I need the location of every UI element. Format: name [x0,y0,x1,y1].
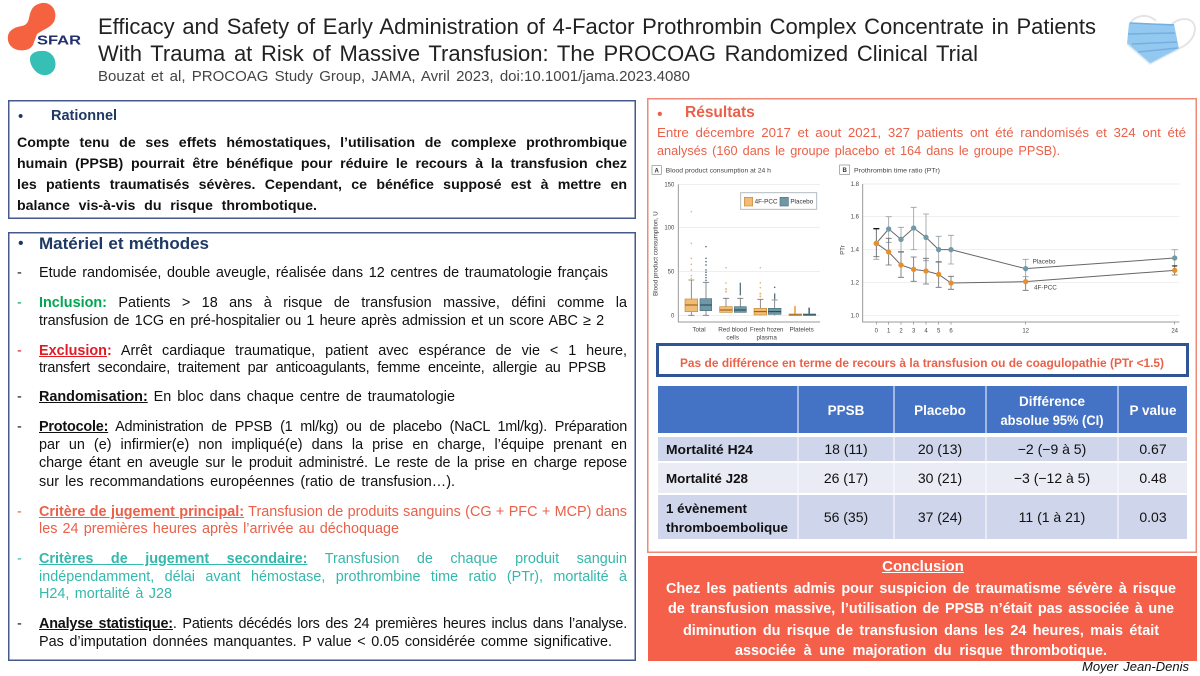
text block: population [657,125,1186,158]
chart: blood product consumption boxplot: plasma [756,334,777,341]
text: exclusion: transfert secondaire, traitement par anticoagulants, femme enceinte, allergie au PPSB [39,360,606,376]
row: événement thromboembolique: thromboembolique [666,520,788,535]
bullet: méthodes: • [18,235,24,252]
chart: blood product consumption boxplot: cells [726,334,739,341]
chart: prothrombin time ratio: 1.2 [851,281,860,287]
text: critère principal: les 24 premières heures après l’arrivée au déchoquage [39,521,399,537]
text: inclusion: Inclusion: Patients > 18 ans à risque de transfusion massive, défini comme la [39,295,627,311]
legend [741,193,817,209]
heading: conclusion: Conclusion [882,558,964,575]
series: 4F-PCC [874,241,1177,286]
text: analyse statistique [17,616,627,650]
bullet: résultats: • [657,106,663,123]
boxes [685,299,802,315]
table: mortalité et événements [658,386,1187,539]
chart: prothrombin time ratio: 1 [887,328,891,334]
chart: blood product consumption boxplot: 150 [664,182,675,188]
text: protocole: par un (e) infirmier(e) non impliqué(e) dans la prise en charge, l’équipe prenant en [39,437,627,453]
row: mortalité H24: 18 (11) [824,441,868,457]
row: mortalité H24: 0.67 [1139,441,1167,457]
text block: population: analysés (160 dans le groupe placebo et 164 dans le groupe PPSB). [657,144,1060,158]
chart: blood product consumption boxplot: Blood product consumption at 24 h [666,167,772,174]
chart: blood product consumption boxplot: 0 [671,313,675,319]
text block: rationale [17,135,627,214]
text: analyse statistique: Analyse statistique:. Patients décédés lors des 24 premières heures inclus dans l’analyse. [39,616,627,632]
chart: prothrombin time ratio: 0 [875,328,879,334]
heading: rationnel: Rationnel [51,108,117,124]
row: événement thromboembolique [658,495,1187,539]
row: événement thromboembolique: 56 (35) [824,509,868,525]
text block: conclusion: associée à une majoration du risque thrombotique. [735,643,1107,659]
text: critère principal: - [17,504,22,520]
row: événement thromboembolique: 1 évènement [666,501,748,516]
row: mortalité J28: −3 (−12 à 5) [1014,470,1090,486]
series: placebo [874,225,1177,271]
whiskers [688,280,778,315]
header row: PPSB [828,403,865,418]
title: With Trauma at Risk of Massive Transfusion: The PROCOAG Randomized Clinical Trial [98,41,978,66]
row: événement thromboembolique: 37 (24) [918,509,962,525]
header row: absolue 95% (CI) [1000,413,1104,428]
legend: 4F-PCC [755,199,778,206]
text: inclusion [17,295,627,329]
chart: prothrombin time ratio: 1.6 [851,215,860,221]
title: Bouzat et al, PROCOAG Study Group, JAMA, Avril 2023, doi:10.1001/jama.2023.4080 [98,68,690,85]
bullet: rationnel: • [18,108,23,125]
title [98,14,1096,85]
chart: prothrombin time ratio: Placebo [1033,258,1056,265]
chart: prothrombin time ratio: 5 [937,328,941,334]
text: randomisation: - [17,389,22,405]
text: inclusion: - [17,295,22,311]
text: critères secondaires: Critères de jugement secondaire: Transfusion de chaque produit sanguin [39,551,627,567]
text block: conclusion [666,581,1176,659]
chart: blood product consumption boxplot: A [654,168,659,174]
panel: rationnel [8,100,636,219]
text: critères secondaires: H24, mortalité à J28 [39,586,172,602]
row: mortalité H24: Mortalité H24 [666,442,754,457]
error bars: placebo [873,207,1178,277]
text: protocole: charge étant en aveugle sur le produit administré. Le reste de la prise en charge repose [39,455,627,471]
chart: prothrombin time ratio: 1.8 [851,182,860,188]
text block: rationale: balance vis-à-vis du risque thrombotique. [17,198,317,214]
text block: conclusion: diminution du risque de transfusion dans les 24 heures, mais était [683,623,1159,639]
text: protocole: - [17,419,22,435]
chart: prothrombin time ratio: 12 [1022,328,1030,334]
chart: prothrombin time ratio: Prothrombin time ratio (PTr) [854,167,940,174]
chart: prothrombin time ratio [839,164,1180,334]
chart: blood product consumption boxplot: Fresh frozen [750,327,784,334]
heading: matériel et méthodes: Matériel et méthodes [39,234,209,252]
row: mortalité H24: −2 (−9 à 5) [1018,441,1086,457]
chart: prothrombin time ratio: 2 [899,328,903,334]
text: critère principal: Critère de jugement principal: Transfusion de produits sanguins (CG + PFC + MCP) dans [39,504,627,520]
chart: prothrombin time ratio: 1.4 [851,248,860,254]
row: événement thromboembolique: 0.03 [1139,509,1167,525]
chart: blood product consumption boxplot: Blood product consumption, U [653,211,660,296]
chart: prothrombin time ratio: 4F-PCC [1034,285,1057,292]
callout: pas de différence: Pas de différence en terme de recours à la transfusion ou de coagulopathie (PTr <1.5) [680,356,1164,370]
text block: conclusion: Chez les patients admis pour suspicion de traumatisme sévère à risque [666,581,1176,597]
text block: rationale: les patients traumatisés sévères. Cependant, ce bénéfice supposé est à mettre en [17,177,627,193]
chart: blood product consumption boxplot: Total [692,327,706,334]
text: critères secondaires: indépendamment, délai avant hémostase, prothrombine time ratio (PTr), mortalité à [39,569,627,585]
header row: Placebo [914,403,966,418]
row: mortalité J28 [658,463,1187,493]
text: critère principal [17,504,627,537]
text: protocole: Protocole: Administration de PPSB (1 ml/kg) ou de placebo (NaCL 1ml/kg). Préparation [39,419,627,435]
chart: prothrombin time ratio: 3 [912,328,916,334]
logo: SFAR [8,2,82,76]
text: design: - [17,265,22,281]
text: analyse statistique: Pas d’imputation données manquantes. P value < 0.05 considérée comme significative. [39,634,612,650]
header row [658,386,1187,433]
panel: résultats [647,98,1197,553]
text block: conclusion: de transfusion massive, l’utilisation de PPSB n’était pas associée à une [668,601,1174,617]
chart: prothrombin time ratio: 4 [924,328,928,334]
text: randomisation: Randomisation: En bloc dans chaque centre de traumatologie [39,389,455,405]
panel: matériel et méthodes [8,232,636,661]
callout: pas de différence [656,343,1189,377]
heading: résultats: Résultats [685,104,755,120]
text: inclusion: transfusion de 1CG en pré-hospitalier ou 1 heure après admission et un score ABC ≥ 2 [39,313,604,329]
row: mortalité J28: Mortalité J28 [666,471,748,486]
header row: Différence [1019,394,1085,409]
text: critères secondaires [17,551,627,602]
text: protocole: sur les recommandations européennes (ratio de transfusion…). [39,474,455,490]
title: Efficacy and Safety of Early Administration of 4-Factor Prothrombin Complex Concentrate in Patients [98,14,1096,39]
text block: rationale: humain (PPSB) pourrait être bénéfique pour réduire le recours à la transfusion chez [17,156,627,172]
chart: prothrombin time ratio: 6 [949,328,953,334]
logo: SFAR: SFAR [37,32,82,48]
error bars: 4F-PCC [873,229,1178,290]
text block: rationale: Compte tenu de ses effets hémostatiques, l’utilisation de complexe prothrombique [17,135,627,151]
chart: prothrombin time ratio: PTr [840,245,846,255]
text: exclusion: Exclusion: Arrêt cardiaque traumatique, patient avec espérance de vie < 1 heure, [39,343,627,359]
row: événement thromboembolique: 11 (1 à 21) [1019,509,1085,525]
row: mortalité H24: 20 (13) [918,441,962,457]
text: exclusion: - [17,343,22,359]
row: mortalité J28: 26 (17) [824,470,868,486]
chart: blood product consumption boxplot: 50 [668,269,675,275]
chart: blood product consumption boxplot [652,165,820,341]
text: exclusion [17,343,627,376]
chart: prothrombin time ratio: 1.0 [851,314,860,320]
legend: Placebo [790,199,814,206]
chart: blood product consumption boxplot: 100 [664,226,675,232]
author credit: Moyer Jean-Denis [1082,658,1189,674]
chart: blood product consumption boxplot: Platelets [790,327,814,334]
text: critères secondaires: - [17,551,22,567]
row: mortalité J28: 0.48 [1139,470,1167,486]
header row: P value [1129,403,1177,418]
text: analyse statistique: - [17,616,22,632]
icon: surgical mask [1126,15,1196,65]
outliers [690,211,796,315]
row: mortalité J28: 30 (21) [918,470,962,486]
panel: conclusion [648,556,1197,661]
row: mortalité H24 [658,437,1187,461]
chart: prothrombin time ratio: 24 [1171,328,1179,334]
chart: blood product consumption boxplot: Red blood [718,327,748,334]
text: protocole [17,419,627,490]
chart: prothrombin time ratio: B [842,168,847,174]
text: design: Etude randomisée, double aveugle, réalisée dans 12 centres de traumatologie français [39,265,608,281]
text block: population: Entre décembre 2017 et aout 2021, 327 patients ont été randomisés et 324 ont été [657,125,1186,140]
